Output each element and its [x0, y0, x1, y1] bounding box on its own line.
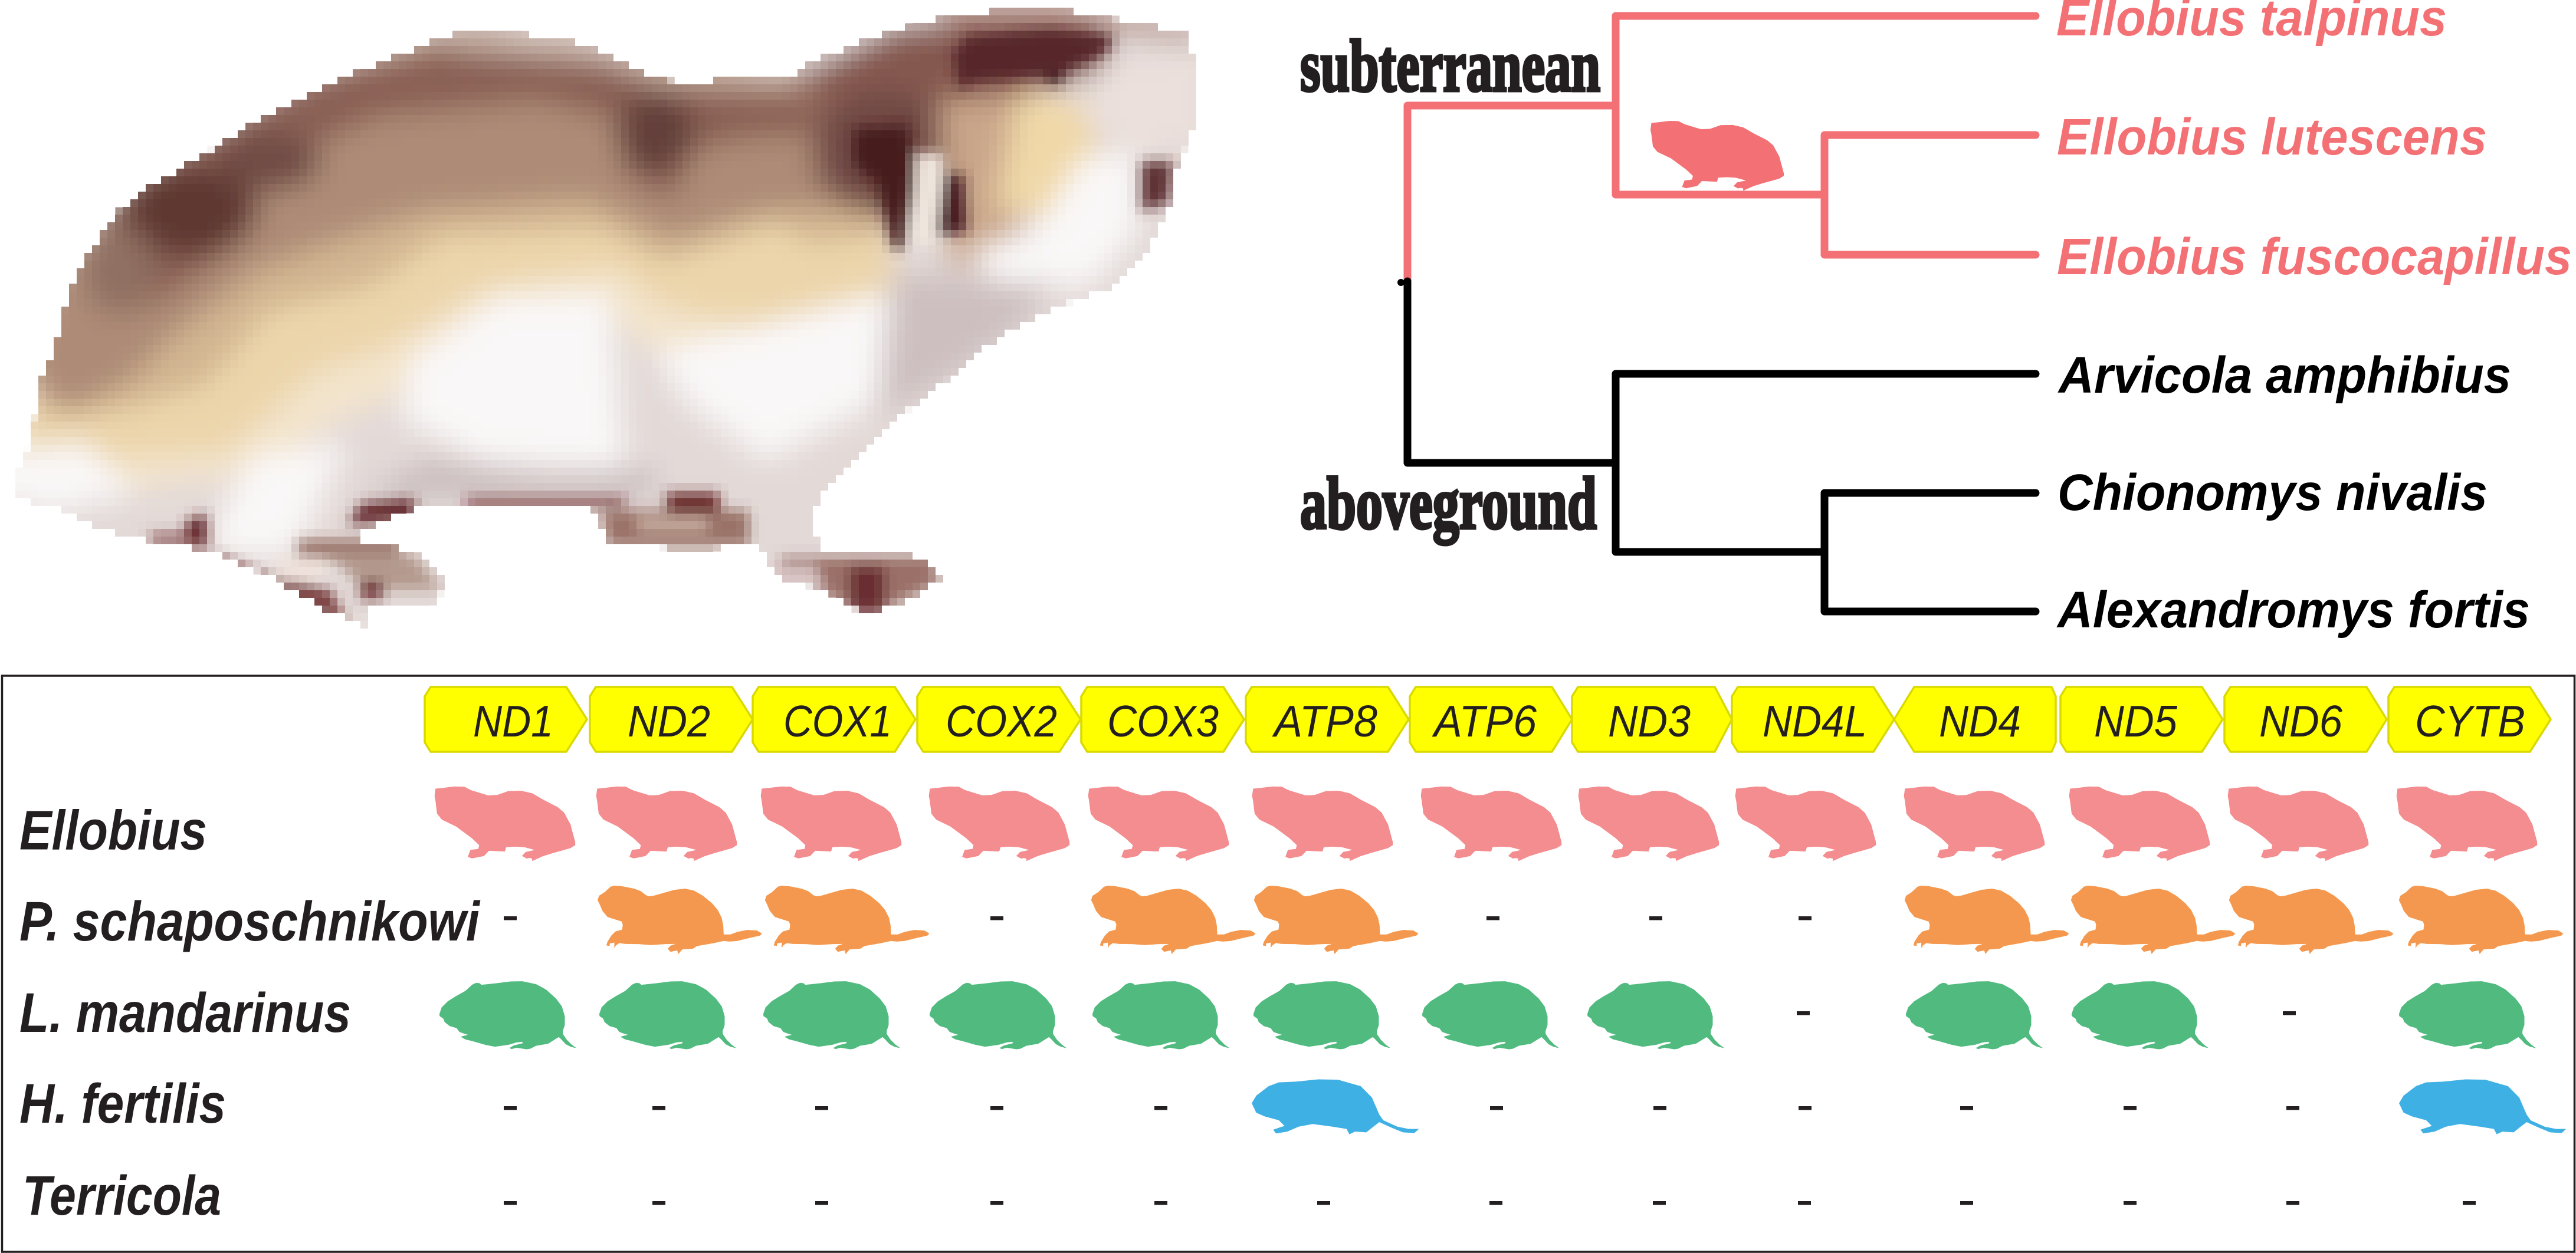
species: Alexandromys fortis: Alexandromys fortis — [2056, 581, 2530, 639]
gene arrow: CYTB — [2388, 687, 2551, 752]
label: aboveground: aboveground — [1300, 463, 1597, 545]
row: Ellobius silhouettes — [435, 787, 2537, 861]
gene name: ND5: ND5 — [2094, 696, 2177, 746]
tree: subterranean clade branches — [1407, 16, 2036, 281]
gene arrow: ATP8 — [1246, 687, 1409, 752]
row: P. schaposchnikowi silhouettes — [598, 886, 2563, 954]
row label: Ellobius: Ellobius — [19, 800, 207, 862]
panel frame — [2, 676, 2574, 1252]
gene names — [473, 696, 2525, 746]
gene arrow: ND3 — [1572, 687, 1732, 752]
absent gene dashes — [504, 916, 2476, 1205]
gene arrow: COX3 — [1081, 687, 1244, 752]
species labels — [2056, 0, 2572, 639]
gene name: ND1: ND1 — [473, 696, 553, 746]
gene arrow: COX1 — [753, 687, 915, 752]
panel: gene presence table — [2, 676, 2574, 1252]
gene arrow: ATP6 — [1410, 687, 1572, 752]
gene name: COX2: COX2 — [946, 696, 1057, 746]
species: Ellobius lutescens: Ellobius lutescens — [2057, 108, 2487, 166]
row label: L. mandarinus: L. mandarinus — [19, 982, 351, 1044]
gene name: ND4L: ND4L — [1763, 696, 1867, 746]
row label: P. schaposchnikowi: P. schaposchnikowi — [19, 890, 481, 953]
gene name: ND2: ND2 — [628, 696, 710, 746]
gene name: ND6: ND6 — [2259, 696, 2342, 746]
row label: H. fertilis: H. fertilis — [19, 1073, 226, 1135]
gene name: COX3: COX3 — [1107, 696, 1219, 746]
species: Arvicola amphibius: Arvicola amphibius — [2057, 347, 2511, 404]
gene arrow: ND6 — [2224, 687, 2387, 752]
illustration: mole vole — [0, 0, 1232, 638]
gene arrows — [425, 687, 2551, 752]
gene name: CYTB: CYTB — [2415, 696, 2525, 746]
gene arrow: ND4L — [1732, 687, 1894, 752]
row label: Terricola: Terricola — [22, 1165, 221, 1227]
gene name: ATP6: ATP6 — [1432, 696, 1537, 746]
row labels — [19, 800, 481, 1227]
phylogenetic tree — [1399, 16, 2036, 611]
label: subterranean: subterranean — [1300, 25, 1600, 107]
tree: aboveground clade branches — [1407, 281, 2036, 611]
gene arrow: ND2 — [590, 687, 753, 752]
gene arrow: ND4 (reversed) — [1894, 687, 2056, 752]
row: L. mandarinus silhouettes — [439, 981, 2536, 1049]
gene name: ND3: ND3 — [1608, 696, 1691, 746]
gene name: ATP8: ATP8 — [1272, 696, 1377, 746]
vole: dark underside and feet — [146, 483, 943, 621]
gene arrow: ND1 — [425, 687, 587, 752]
icon: pink mole vole silhouette on tree — [1650, 121, 1784, 190]
species: Chionomys nivalis: Chionomys nivalis — [2057, 464, 2488, 521]
gene arrow: ND5 — [2060, 687, 2223, 752]
gene name: COX1: COX1 — [783, 696, 892, 746]
row: H. fertilis silhouettes — [1252, 1079, 2566, 1134]
gene arrow: COX2 — [917, 687, 1081, 752]
gene name: ND4: ND4 — [1939, 696, 2021, 746]
tree: root node — [1399, 280, 1403, 285]
